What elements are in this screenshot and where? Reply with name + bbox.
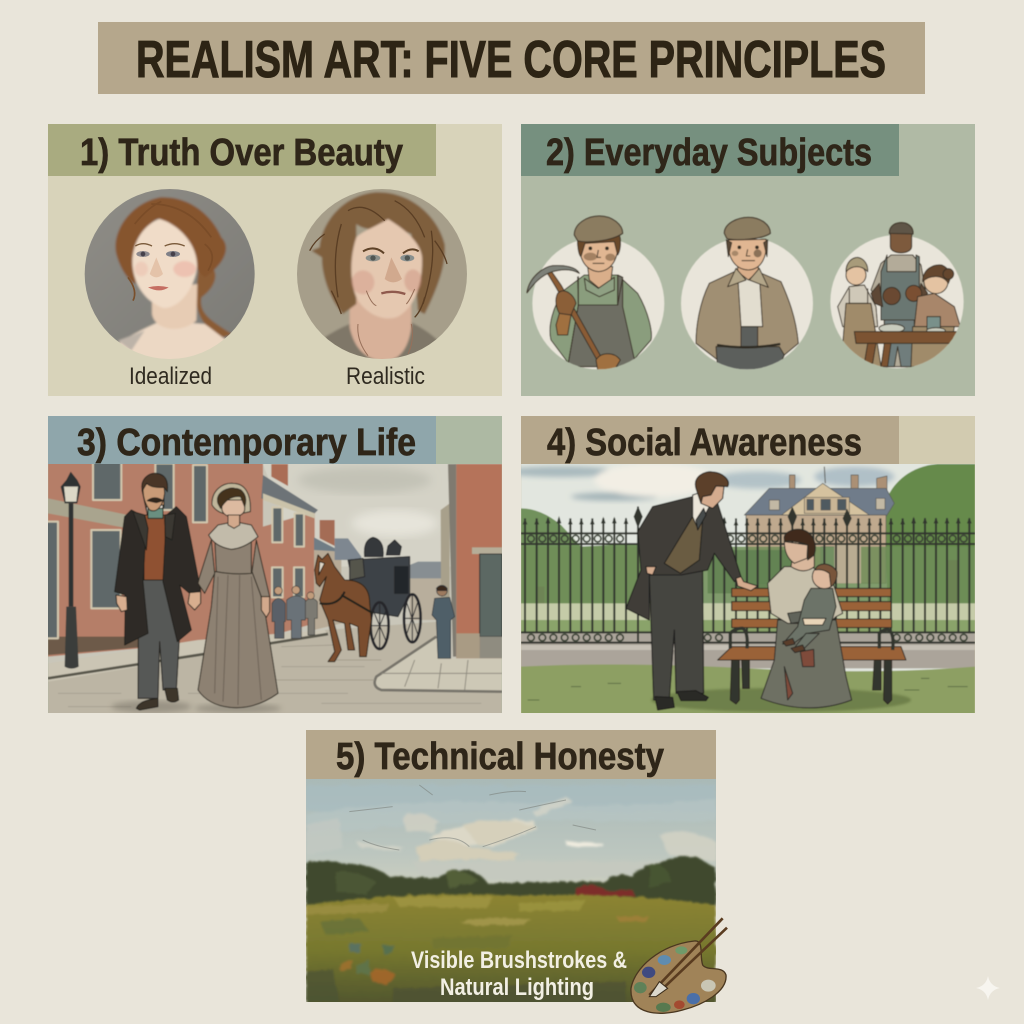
heading: everyday subjects: 2) Everyday Subjects [546, 132, 872, 174]
woman and child [761, 529, 852, 708]
illustration: painted landscape [306, 779, 716, 1005]
figure: worker in vest [696, 217, 798, 370]
panel: truth over beauty [48, 124, 502, 396]
heading: truth over beauty: 1) Truth Over Beauty [80, 132, 403, 174]
illustration: street scene [45, 460, 502, 717]
trees [521, 508, 641, 613]
heading: contemporary life: 3) Contemporary Life [77, 422, 416, 464]
tree line [306, 856, 716, 907]
lawn behind fence [521, 547, 975, 603]
distant buildings [314, 538, 341, 630]
portrait circles [532, 235, 964, 369]
street [48, 622, 502, 714]
panel: social awareness [504, 416, 975, 717]
man by doorway [432, 585, 455, 658]
mansion [744, 467, 894, 583]
panel: contemporary life [45, 416, 502, 717]
figure: miner with pickaxe [527, 216, 651, 370]
background pedestrians [272, 586, 317, 638]
clouds [504, 463, 894, 501]
gentleman [626, 472, 758, 710]
right building [440, 504, 450, 598]
left buildings [48, 460, 315, 657]
bench [718, 588, 906, 704]
caption: visible brushstrokes: Visible Brushstrokes & [411, 947, 627, 974]
horse [315, 553, 373, 662]
windows [45, 462, 304, 638]
shadows [651, 688, 911, 712]
gentleman [111, 473, 201, 713]
icon: artist palette [631, 918, 727, 1013]
grass tufts [528, 678, 968, 700]
figure: family at table [838, 223, 960, 367]
iron fence [521, 507, 975, 643]
caption: visible brushstrokes: Natural Lighting [440, 974, 594, 1001]
panel: everyday subjects [521, 124, 975, 396]
lamp post [61, 472, 81, 669]
field [306, 894, 716, 1005]
label: realistic: Realistic [346, 363, 425, 390]
portrait: realistic [295, 187, 471, 364]
carriage [348, 537, 421, 649]
icon: sparkle [976, 976, 1000, 1000]
illustration: park scene [504, 460, 975, 717]
panel: technical honesty [306, 730, 727, 1013]
sky [261, 460, 455, 567]
heading: social awareness: 4) Social Awareness [547, 422, 862, 464]
heading: technical honesty: 5) Technical Honesty [336, 736, 664, 778]
portrait: idealized [81, 187, 258, 364]
caption: visible brushstrokes [411, 947, 627, 1001]
lady [195, 483, 281, 713]
label: idealized: Idealized [129, 363, 212, 390]
path and grass [521, 633, 975, 668]
